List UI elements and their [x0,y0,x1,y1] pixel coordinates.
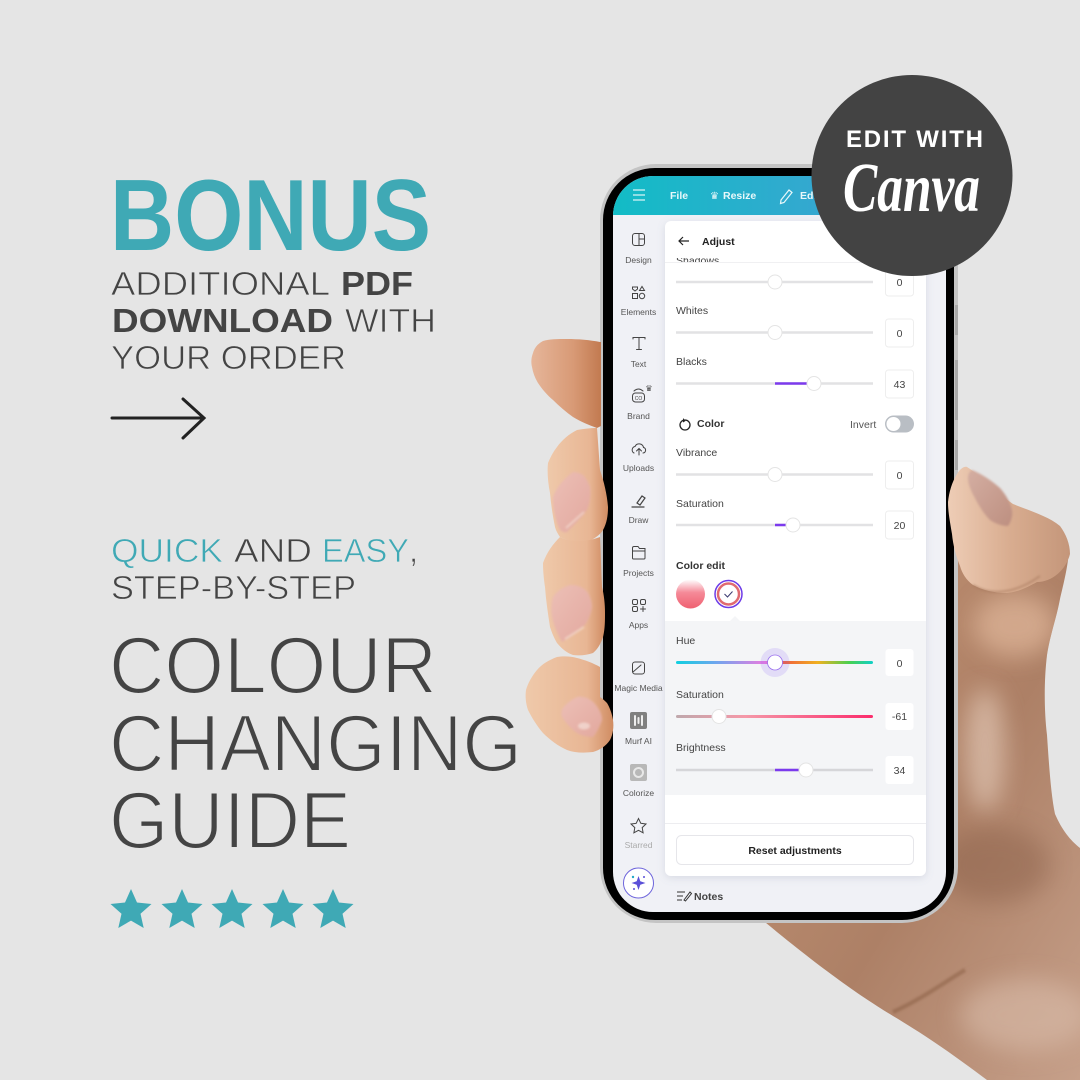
color edit swatches: Color edit [676,560,726,572]
nav: starred: Starred [625,840,653,850]
nav: uploads: Uploads [623,463,654,473]
heading: BONUS: BONUS [110,160,431,272]
control: vibrance [676,447,914,489]
text: additional PDF download with your order: YOUR ORDER [111,339,346,376]
nav: elements: Elements [621,307,656,317]
panel header [665,236,862,263]
nav: uploads [623,444,654,473]
screen [613,176,946,912]
text: additional PDF download with your order: ADDITIONAL [111,265,330,302]
app header bar: Edit [800,190,820,202]
text: quick and easy step-by-step: AND [234,532,312,569]
ring nail highlight [565,627,584,639]
control: shadows: 0 [897,277,903,289]
nav: brand: Brand [627,411,650,421]
hand: index finger [531,339,601,428]
control: shadows [676,272,914,296]
ring fingernail [551,585,592,642]
nav: magic media: Magic Media [614,683,663,693]
pinky fingernail [561,697,602,737]
app header bar: ♛ [710,191,719,202]
text: additional PDF download with your order: DOWNLOAD [112,302,333,339]
badge: edit with canva: EDIT WITH [846,126,983,153]
text: quick and easy step-by-step: STEP-BY-STEP [111,569,356,606]
control: color saturation [676,689,914,730]
control: saturation [676,498,914,539]
phone side buttons [955,305,958,470]
color edit section background [665,616,926,795]
rating stars [110,889,354,928]
text: quick and easy step-by-step: QUICK [111,532,223,569]
nav: apps [629,600,648,630]
control: whites: 0 [897,328,903,340]
color edit swatches [676,560,742,608]
thumb nail [968,470,1012,526]
text: additional PDF download with your order [111,265,436,376]
nav: projects [623,546,654,578]
control: brightness: Brightness [676,742,726,754]
thumb crease [973,576,1040,592]
control: hue: 0 [897,658,903,670]
control: whites: Whites [676,305,708,317]
nav: colorize [623,764,654,798]
sidebar navigation [614,234,663,850]
control: saturation: 20 [894,520,905,532]
nav: murf ai [625,712,652,746]
middle nail highlight [566,512,584,528]
heading: colour changing guide: COLOUR [109,621,437,711]
nav: starred [625,818,653,850]
nav: draw: Draw [629,515,649,525]
icon: arrow [112,399,204,438]
notes label: Notes [694,891,723,903]
nav: apps: Apps [629,620,648,630]
nav: text: Text [631,359,647,369]
middle fingernail [553,472,590,532]
badge: edit with canva: Canva [843,150,980,227]
nav: projects: Projects [623,568,654,578]
hand: pinky finger [526,656,613,753]
nav: design: Design [625,255,652,265]
app header bar: Resize [723,190,756,202]
text: additional PDF download with your order: PDF [341,265,413,302]
control: whites [676,305,914,347]
control: hue: Hue [676,635,695,647]
heading: colour changing guide: CHANGING [109,699,522,789]
hand: thumb [948,467,1070,593]
reset button: Reset adjustments [748,845,842,857]
control: blacks: Blacks [676,356,707,368]
text: quick and easy step-by-step: EASY [322,532,409,569]
app header bar [613,176,820,215]
control: blacks [676,356,914,398]
nav: design [625,234,652,265]
control: vibrance: 0 [897,470,903,482]
hand: ring finger [543,537,605,655]
section: color with invert toggle: Invert [850,419,876,431]
reset button [676,836,914,864]
magic button [624,868,654,898]
notes label [677,891,723,903]
control: blacks: 43 [894,379,905,391]
heading: colour changing guide [109,621,522,866]
phone [600,164,958,923]
nav: brand: ♛ [645,384,653,393]
nav: colorize: Colorize [623,788,654,798]
panel header: Adjust [702,236,735,248]
control: brightness: 34 [894,765,905,777]
nav: murf ai: Murf AI [625,736,652,746]
text: quick and easy step-by-step: , [409,532,418,569]
nav: elements [621,286,656,317]
nav: draw [629,496,649,525]
phone frame [600,164,958,923]
badge: edit with canva [812,75,1012,276]
section: color with invert toggle [680,416,914,432]
app header bar: File [670,190,688,202]
section: color with invert toggle: Color [697,418,724,430]
nav: text [631,338,647,369]
adjust panel [665,221,926,876]
nav: magic media [614,662,663,693]
control: color saturation: -61 [892,711,907,723]
heading: colour changing guide: GUIDE [109,776,351,866]
heading: bonus block [110,160,436,376]
text: quick and easy step-by-step [111,532,418,606]
text: additional PDF download with your order: WITH [345,302,436,339]
hand: middle finger [548,428,608,542]
nav: brand: CO [635,396,642,402]
control: brightness [676,742,914,784]
control: vibrance: Vibrance [676,447,717,459]
control: color saturation: Saturation [676,689,724,701]
control: hue [676,635,914,677]
hand: palm and forearm behind phone [760,555,1080,1080]
panel header: Shadows [676,255,719,267]
control: saturation: Saturation [676,498,724,510]
nav: brand [628,385,652,419]
pinky nail highlight [578,722,590,730]
